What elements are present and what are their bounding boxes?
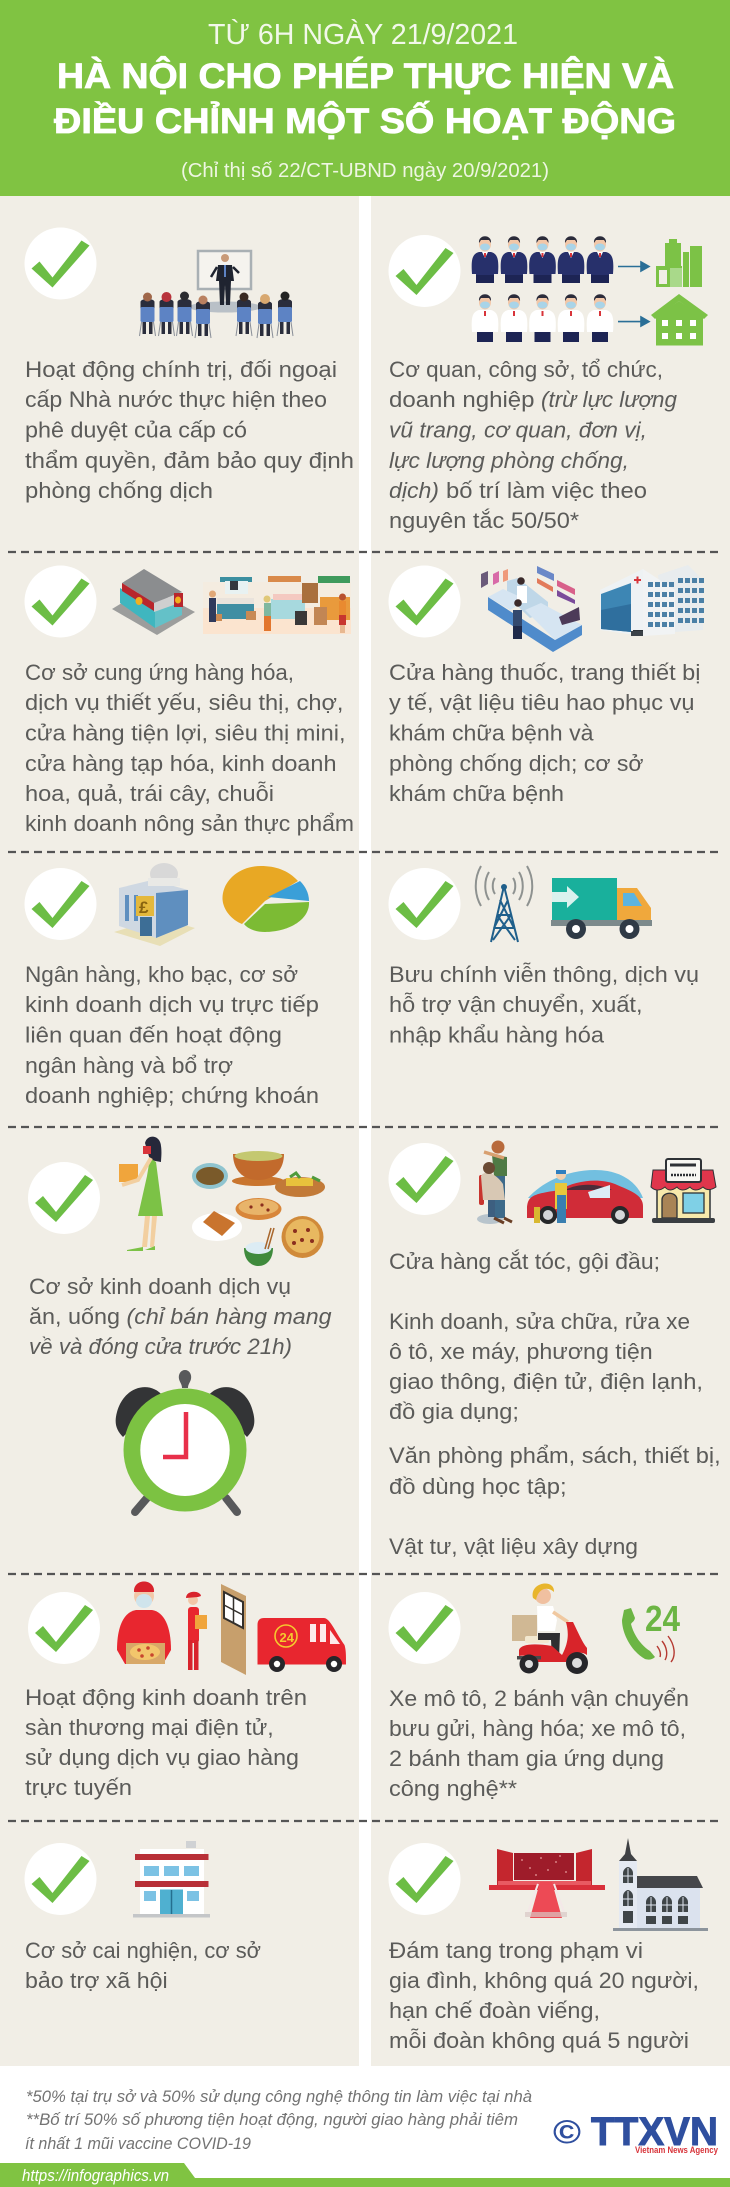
- icon: check mark: [388, 235, 460, 307]
- text: Bưu chính viễn thông, dịch vụ: [389, 962, 699, 987]
- text: khám chữa bệnh và: [389, 720, 594, 746]
- icon: office buildings: [656, 239, 702, 287]
- icon: check mark: [24, 228, 96, 300]
- text: sàn thương mại điện tử,: [25, 1715, 274, 1740]
- icon: courier at door: [186, 1584, 246, 1675]
- title: [54, 56, 676, 141]
- text: Hoạt động kinh doanh trên: [25, 1685, 307, 1710]
- icon: courier on scooter: [512, 1583, 588, 1674]
- text: cửa hàng tạp hóa, kinh doanh: [25, 751, 336, 776]
- text: (chỉ bán hàng mang: [126, 1304, 332, 1329]
- text: y tế, vật liệu tiêu hao phục vụ: [389, 690, 694, 715]
- icon: check mark: [388, 1592, 460, 1664]
- text: [389, 1249, 721, 1559]
- text: khám chữa bệnh: [389, 781, 564, 806]
- footnotes: **Bố trí 50% số phương tiện hoạt động, người giao hàng phải tiêm: [26, 2110, 518, 2129]
- text: Cơ sở cung ứng hàng hóa,: [25, 660, 294, 685]
- text: cấp Nhà nước thực hiện theo: [25, 387, 327, 412]
- text: [25, 1938, 261, 1993]
- text: ngân hàng và bổ trợ: [25, 1053, 233, 1078]
- header banner: [0, 0, 730, 196]
- text: [389, 357, 677, 533]
- text: mỗi đoàn không quá 5 người: [389, 2028, 689, 2053]
- icon: stationery shop: [651, 1159, 716, 1223]
- icon: pie chart: [222, 866, 309, 932]
- panel: banking: [24, 863, 319, 1108]
- text: Hoạt động chính trị, đối ngoại: [25, 357, 337, 382]
- icon: bank building: [114, 863, 195, 946]
- text: Vật tư, vật liệu xây dựng: [389, 1534, 638, 1559]
- icon: presentation audience: [140, 251, 293, 338]
- icon: red delivery van: 24: [280, 1630, 295, 1645]
- text: [389, 660, 700, 806]
- footnotes: *50% tại trụ sở và 50% sử dụng công nghệ thông tin làm việc tại nhà: [26, 2087, 532, 2106]
- footnotes: [25, 2087, 532, 2153]
- icon: check mark: [28, 1162, 100, 1234]
- icon: pharmacy counter: [481, 566, 582, 652]
- text: Xe mô tô, 2 bánh vận chuyển: [389, 1686, 689, 1711]
- text: [29, 1274, 332, 1359]
- text: doanh nghiệp; chứng khoán: [25, 1083, 319, 1108]
- text: (trừ lực lượng: [541, 387, 677, 412]
- text: Kinh doanh, sửa chữa, rửa xe: [389, 1309, 690, 1334]
- text: về và đóng cửa trước 21h): [29, 1334, 292, 1359]
- subtitle: (Chỉ thị số 22/CT-UBND ngày 20/9/2021): [181, 160, 549, 182]
- footer url bar: https://infographics.vn: [22, 2166, 169, 2185]
- icon: social centre building: [133, 1841, 210, 1918]
- text: bảo trợ xã hội: [25, 1968, 168, 1993]
- icon: signal tower: [476, 866, 532, 942]
- text: Cơ sở kinh doanh dịch vụ: [29, 1274, 291, 1299]
- text: thẩm quyền, đảm bảo quy định: [25, 448, 354, 473]
- icon: car wash: [527, 1170, 643, 1224]
- text: kinh doanh nông sản thực phẩm: [25, 811, 354, 836]
- text: bố trí làm việc theo: [446, 478, 647, 503]
- icon: check mark: [388, 1143, 460, 1215]
- icon: alarm clock: [116, 1370, 254, 1512]
- panel: funerals: [388, 1838, 708, 2053]
- logo: TTXVN: TTXVN: [591, 2110, 718, 2154]
- icon: check mark: [388, 1843, 460, 1915]
- panel: essential goods: [24, 566, 354, 836]
- date line: TỪ 6H NGÀY 21/9/2021: [208, 18, 518, 51]
- panel: services and retail: [388, 1140, 721, 1559]
- text: dịch): [389, 478, 439, 503]
- icon: home: [651, 294, 708, 346]
- arrow to home: [618, 317, 649, 326]
- panel: political activities: [24, 228, 354, 503]
- text: gia đình, không quá 20 người,: [389, 1968, 699, 1993]
- title: ĐIỀU CHỈNH MỘT SỐ HOẠT ĐỘNG: [54, 101, 676, 141]
- icon: market stalls: [203, 576, 351, 634]
- text: dịch vụ thiết yếu, siêu thị, chợ,: [25, 690, 344, 715]
- panel: e-commerce: [25, 1582, 346, 1800]
- icon: red delivery van: [258, 1618, 346, 1672]
- text: giao thông, điện tử, điện lạnh,: [389, 1369, 703, 1394]
- text: hạn chế đoàn viếng,: [389, 1998, 600, 2023]
- text: trực tuyến: [25, 1775, 132, 1800]
- text: phòng chống dịch; cơ sở: [389, 751, 644, 776]
- text: đồ gia dụng;: [389, 1399, 519, 1424]
- text: Cửa hàng thuốc, trang thiết bị: [389, 660, 700, 685]
- text: hỗ trợ vận chuyển, xuất,: [389, 992, 642, 1017]
- footnotes: ít nhất 1 mũi vaccine COVID-19: [25, 2134, 252, 2153]
- text: [25, 1685, 307, 1800]
- text: bưu gửi, hàng hóa; xe mô tô,: [389, 1716, 686, 1741]
- text: Văn phòng phẩm, sách, thiết bị,: [389, 1443, 721, 1468]
- text: Ngân hàng, kho bạc, cơ sở: [25, 962, 298, 987]
- text: liên quan đến hoạt động: [25, 1022, 282, 1048]
- text: ô tô, xe máy, phương tiện: [389, 1339, 653, 1364]
- icon: masked staff rows: [472, 236, 613, 342]
- icon: phone 24h: [622, 1598, 680, 1662]
- icon: check mark: [28, 1592, 100, 1664]
- text: cửa hàng tiện lợi, siêu thị mini,: [25, 720, 346, 746]
- arrow to office: [618, 262, 649, 271]
- panel: motorbike delivery: [388, 1583, 689, 1801]
- icon: delivery man with pizza: [117, 1582, 171, 1664]
- text: kinh doanh dịch vụ trực tiếp: [25, 992, 319, 1017]
- text: Cửa hàng cắt tóc, gội đầu;: [389, 1249, 660, 1274]
- text: [25, 660, 354, 836]
- icon: phone 24h: 24: [645, 1598, 680, 1639]
- logo: TTXVN: Vietnam News Agency: [635, 2145, 718, 2155]
- icon: barber: [477, 1140, 512, 1224]
- icon: bank building: £: [139, 898, 149, 917]
- text: hoa, quả, trái cây, chuỗi: [25, 781, 274, 806]
- panel: offices 50/50: [388, 235, 708, 533]
- text: phòng chống dịch: [25, 478, 213, 503]
- text: đồ dùng học tập;: [389, 1474, 567, 1499]
- title: HÀ NỘI CHO PHÉP THỰC HIỆN VÀ: [57, 56, 674, 96]
- icon: supermarket building: [112, 569, 195, 635]
- text: ăn, uống: [29, 1304, 120, 1329]
- text: Cơ quan, công sở, tổ chức,: [389, 357, 663, 382]
- footer url bar: [0, 2163, 730, 2187]
- text: công nghệ**: [389, 1776, 517, 1801]
- text: vũ trang, cơ quan, đơn vị,: [389, 418, 647, 442]
- logo: TTXVN: ©: [553, 2113, 581, 2150]
- text: [389, 1938, 699, 2053]
- text: [25, 357, 354, 503]
- panel: rehab centres: [24, 1841, 261, 1993]
- icon: woman carrying box: [119, 1137, 163, 1251]
- text: sử dụng dịch vụ giao hàng: [25, 1745, 299, 1770]
- icon: funeral stage: [489, 1849, 605, 1918]
- icon: check mark: [388, 868, 460, 940]
- text: nhập khẩu hàng hóa: [389, 1022, 604, 1048]
- icon: dishes: [192, 1151, 325, 1266]
- text: [389, 1686, 689, 1801]
- panel: telecom and transport: [388, 866, 699, 1048]
- text: lực lượng phòng chống,: [389, 448, 629, 473]
- icon: church: [613, 1838, 708, 1931]
- text: nguyên tắc 50/50*: [389, 508, 579, 533]
- text: doanh nghiệp: [389, 387, 534, 412]
- text: 2 bánh tham gia ứng dụng: [389, 1746, 664, 1771]
- text: phê duyệt của cấp có: [25, 418, 247, 442]
- panel: food and drink: [28, 1137, 332, 1512]
- icon: delivery truck: [551, 878, 652, 939]
- panel: pharmacies and medical: [388, 565, 704, 806]
- text: [25, 962, 319, 1108]
- icon: check mark: [388, 566, 460, 638]
- icon: check mark: [24, 868, 96, 940]
- icon: check mark: [24, 566, 96, 638]
- icon: hospital building: [600, 565, 704, 636]
- text: Đám tang trong phạm vi: [389, 1938, 643, 1963]
- icon: check mark: [24, 1843, 96, 1915]
- text: [389, 962, 699, 1048]
- text: Cơ sở cai nghiện, cơ sở: [25, 1938, 261, 1963]
